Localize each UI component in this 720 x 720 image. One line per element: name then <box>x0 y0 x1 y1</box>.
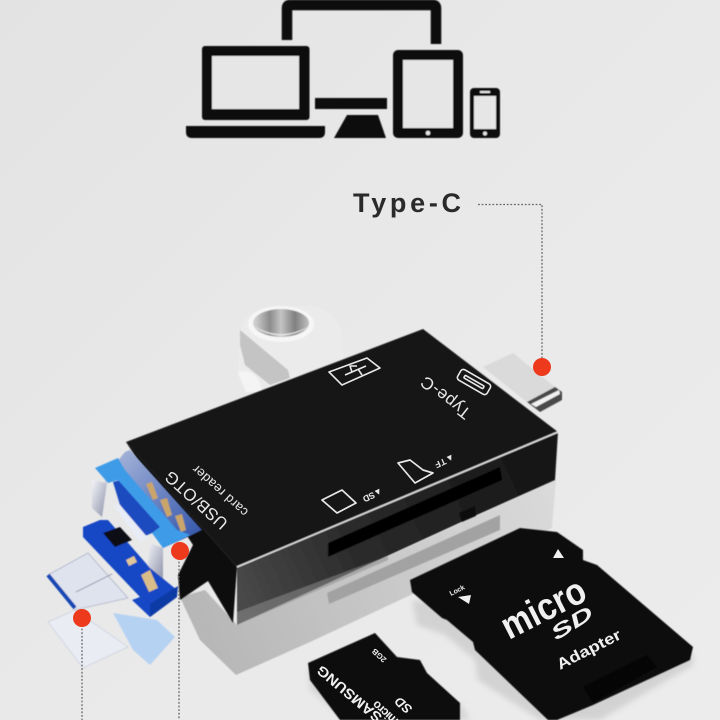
USB-A shell interior <box>105 450 202 548</box>
text: Adapter: Adapter <box>554 627 624 674</box>
USB connectors <box>48 450 202 668</box>
adapter recess <box>583 655 657 703</box>
blue plug tongue <box>83 520 178 617</box>
icon: laptop <box>186 46 325 138</box>
mark: lock triangle <box>458 595 471 604</box>
text: micro: micro <box>494 570 593 648</box>
icon: USB symbol on reader <box>329 358 380 385</box>
icon: smartphone <box>470 88 500 138</box>
mark: SD: ▲SD <box>361 486 384 504</box>
front face with card slot <box>237 432 558 625</box>
steel walls <box>92 480 107 517</box>
mark: TF: ▲TF <box>433 452 456 470</box>
SD adapter card <box>410 528 693 720</box>
text: Lock: Lock <box>449 584 466 598</box>
USB-A contacts <box>146 482 186 532</box>
text: 2GB: 2GB <box>370 646 388 664</box>
leader lines: USB connectors <box>82 558 179 720</box>
left end of body <box>126 442 237 623</box>
icon: SD outline on reader <box>322 490 356 513</box>
mark: USB/OTG: USB/OTG <box>161 467 232 533</box>
micro USB plug, transparent with reflection <box>48 553 175 668</box>
top face <box>126 329 558 567</box>
mark: Type-C: Type-C <box>417 372 474 423</box>
card reader body <box>126 329 558 625</box>
Type-C plug <box>483 353 562 412</box>
microSD card <box>308 633 470 720</box>
icon: tablet <box>393 50 463 138</box>
USB-A inner white strip <box>113 505 148 542</box>
icon: desktop monitor <box>287 5 436 138</box>
light blue frame <box>95 458 190 548</box>
mark: top triangle <box>553 549 564 558</box>
USB-A inner tongue <box>113 480 160 536</box>
reflection of reader <box>180 480 556 675</box>
icon group: connected devices <box>186 5 500 138</box>
leader line: Type-C <box>478 204 542 360</box>
icon: Type-C port on reader <box>456 368 492 396</box>
text: SD: SD <box>391 693 415 717</box>
text: SD: SD <box>547 602 598 645</box>
adapter printed text <box>449 549 624 674</box>
label: Type-C: Type-C <box>353 188 461 218</box>
printed marks on reader <box>161 372 474 533</box>
microSD printed text <box>313 646 415 720</box>
icon: TF outline on reader <box>398 460 433 483</box>
keychain ring <box>238 306 345 392</box>
callout dots <box>73 358 551 627</box>
mark: card reader: card reader <box>188 461 251 520</box>
